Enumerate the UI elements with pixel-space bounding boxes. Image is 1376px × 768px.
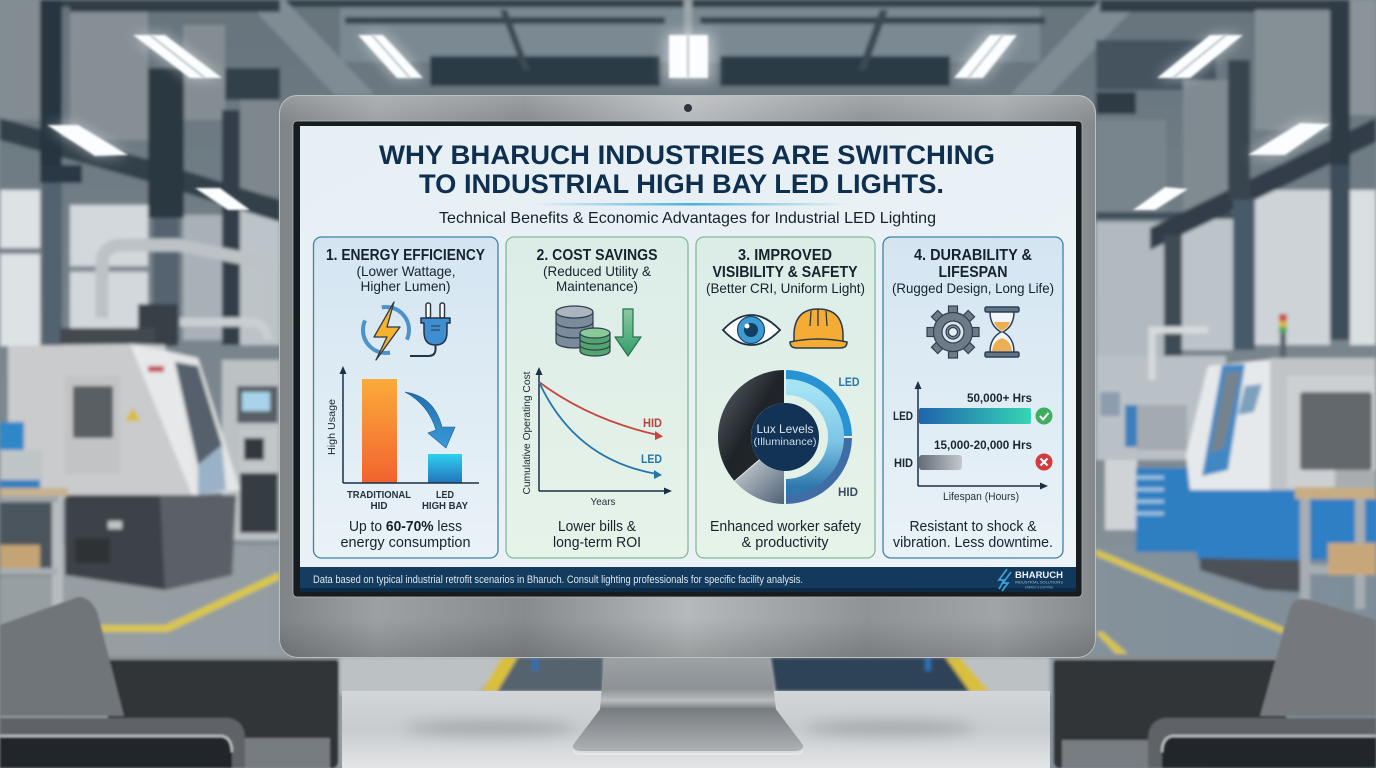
heading: durability and lifespan <box>892 247 1054 296</box>
bar chart: energy usage <box>326 366 479 512</box>
left machine <box>222 360 280 540</box>
title <box>379 140 995 199</box>
pipes <box>102 245 270 345</box>
screen bezel <box>293 121 1082 597</box>
monitor stand <box>573 657 803 755</box>
right wall <box>1096 120 1166 212</box>
heading: cost savings: (Reduced Utility & <box>543 263 652 279</box>
cost note <box>553 518 641 551</box>
line chart: operating cost: HID <box>643 416 662 430</box>
heading: visibility and safety: (Better CRI, Uniform Light) <box>706 280 865 296</box>
left wall <box>0 0 40 120</box>
icon: coin stacks <box>556 306 610 356</box>
heading: visibility and safety: 3. IMPROVED <box>738 247 832 264</box>
bar chart: lifespan: HID <box>894 456 913 470</box>
desk surface <box>342 691 1050 768</box>
icon: gear <box>927 306 979 358</box>
durability note: Resistant to shock & <box>910 518 1036 535</box>
heading: visibility and safety: VISIBILITY & SAFETY <box>712 264 858 281</box>
bar chart: lifespan: Lifespan (Hours) <box>943 491 1019 503</box>
title: TO INDUSTRIAL HIGH BAY LED LIGHTS. <box>419 169 944 199</box>
bar chart: energy usage: LED <box>436 490 454 501</box>
cost note: Lower bills & <box>558 518 636 535</box>
heading: energy efficiency: Higher Lumen) <box>360 278 450 294</box>
logo: INDUSTRIAL SOLUTIONS <box>1015 580 1063 584</box>
heading: energy efficiency: 1. ENERGY EFFICIENCY <box>326 247 485 264</box>
disclaimer: Data based on typical industrial retrofit scenarios in Bharuch. Consult lighting professionals for specific facility analysis. <box>313 574 803 586</box>
line chart: operating cost <box>521 367 672 508</box>
heading: visibility and safety <box>706 247 865 296</box>
durability note: vibration. Less downtime. <box>893 534 1053 551</box>
donut chart: lux levels: Lux Levels <box>756 422 814 436</box>
armchair right <box>1054 599 1376 768</box>
heading: cost savings: Maintenance) <box>556 278 638 294</box>
safety note <box>710 518 861 551</box>
floor <box>0 545 1376 768</box>
heading: energy efficiency <box>326 247 485 294</box>
icon: cross <box>1036 454 1052 470</box>
donut chart: lux levels <box>718 370 860 504</box>
icon: hard hat <box>790 309 847 348</box>
title: WHY BHARUCH INDUSTRIES ARE SWITCHING <box>379 140 995 170</box>
heading: energy efficiency: (Lower Wattage, <box>356 263 456 279</box>
energy note <box>340 518 470 551</box>
bar chart: energy usage: TRADITIONAL <box>347 490 411 501</box>
heading: cost savings: 2. COST SAVINGS <box>536 247 658 264</box>
panel: visibility and safety <box>696 237 875 558</box>
icon: eye <box>723 315 780 345</box>
infographic screen <box>300 126 1076 592</box>
donut chart: lux levels: (Illuminance) <box>754 437 816 448</box>
bar chart: lifespan: 15,000-20,000 Hrs <box>934 438 1032 452</box>
panel: cost savings <box>506 237 688 558</box>
bar chart: energy usage: High Usage <box>326 399 338 455</box>
energy note: energy consumption <box>340 534 470 551</box>
icon: plug <box>410 303 450 356</box>
energy note: Up to 60-70% less <box>349 518 462 535</box>
heading: durability and lifespan: (Rugged Design, Long Life) <box>892 280 1054 296</box>
durability note <box>893 518 1053 551</box>
ceiling light glows <box>47 33 1330 156</box>
webcam <box>684 104 692 112</box>
logo <box>999 569 1063 591</box>
icon: hourglass <box>985 307 1019 357</box>
donut chart: lux levels: HID <box>838 485 858 499</box>
left table and equipment <box>0 422 24 450</box>
footer bar <box>300 567 1076 592</box>
cost note: long-term ROI <box>553 534 641 551</box>
panel: durability and lifespan <box>883 237 1063 558</box>
icon: down arrow <box>615 309 641 356</box>
bar chart: lifespan <box>893 381 1052 503</box>
heading: durability and lifespan: 4. DURABILITY & <box>914 247 1032 264</box>
panel: energy efficiency <box>314 237 498 558</box>
safety note: & productivity <box>742 534 829 551</box>
line chart: operating cost: LED <box>641 452 662 466</box>
donut chart: lux levels: LED <box>838 375 860 389</box>
bar chart: lifespan: LED <box>893 409 913 423</box>
logo: BHARUCH <box>1015 570 1063 581</box>
line chart: operating cost: Years <box>590 496 616 508</box>
bar chart: lifespan: 50,000+ Hrs <box>967 391 1032 405</box>
right background machines <box>1096 356 1226 460</box>
bar chart: energy usage: HID <box>370 501 388 512</box>
arrow: down to LED <box>405 392 455 448</box>
icon: check <box>1036 408 1052 424</box>
subtitle: Technical Benefits & Economic Advantages for Industrial LED Lighting <box>439 210 936 227</box>
monitor frame <box>279 95 1096 658</box>
bar chart: energy usage: HIGH BAY <box>422 501 468 512</box>
heading: durability and lifespan: LIFESPAN <box>938 264 1008 281</box>
armchair left <box>0 597 338 768</box>
line chart: operating cost: Cumulative Operating Cost <box>521 371 533 494</box>
icon: lightning bolt <box>363 302 409 360</box>
heading: cost savings <box>536 247 658 294</box>
safety note: Enhanced worker safety <box>710 518 861 535</box>
logo: ENERGY & LIGHTING <box>1025 586 1053 590</box>
